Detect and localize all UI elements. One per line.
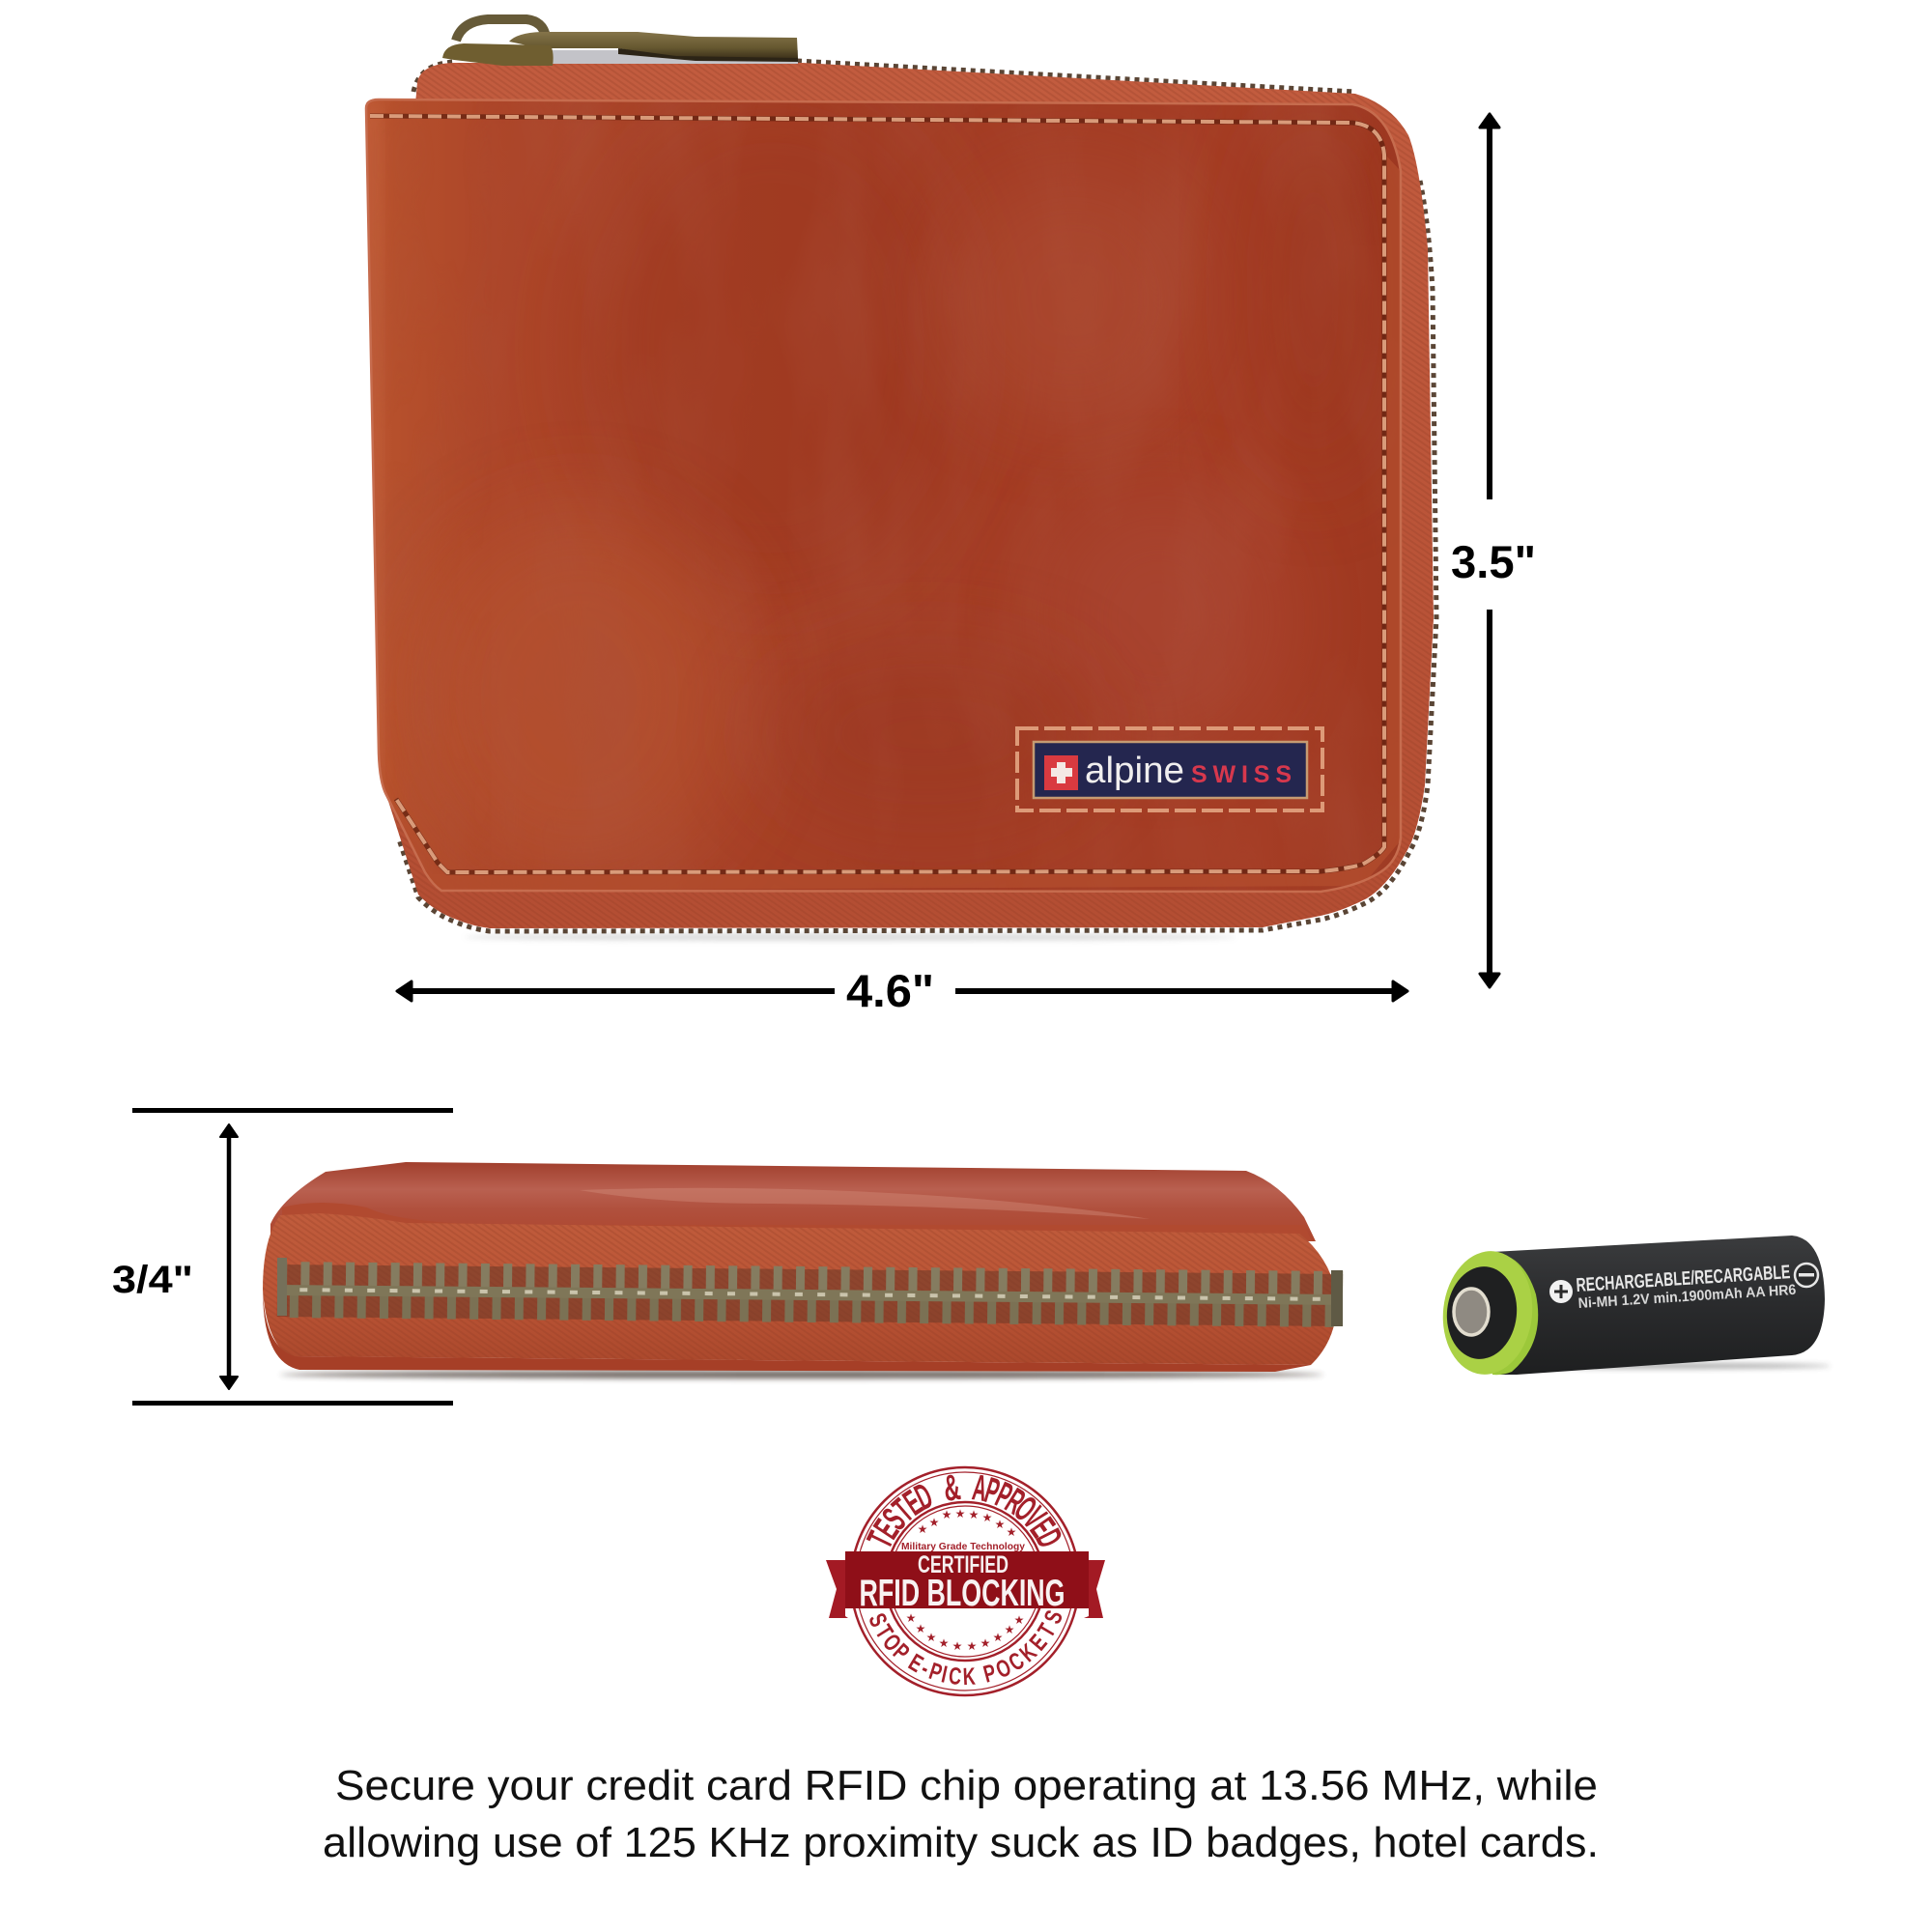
description text [323,1762,1599,1866]
seal top text: O [1007,1490,1043,1529]
seal bottom text: O [992,1653,1015,1684]
RFID blocking text: RFID BLOCKING [860,1573,1065,1614]
seal bottom text: K [1014,1638,1042,1667]
battery text line 1: RECHARGEABLE/RECARGABLE [1576,1262,1791,1296]
seal bottom stars: ★ [1014,1613,1024,1627]
leather tab [509,32,798,58]
width label: 4.6" [846,965,934,1016]
negative symbol [1795,1264,1818,1287]
dark battery end [1442,1263,1521,1363]
zipper end left [277,1258,287,1316]
width dimension arrow [397,965,1407,1016]
label stitching [1017,728,1322,810]
seal bottom stars: ★ [993,1631,1003,1644]
zipper dark tape [277,1264,1343,1326]
seal bottom text: P [888,1637,915,1666]
green ring face [1437,1247,1538,1378]
seal bottom text: S [1038,1606,1068,1628]
seal top text: V [1015,1500,1053,1536]
battery text line 2: Ni-MH 1.2V min.1900mAh AA HR6 [1577,1282,1797,1312]
seal top stars: ★ [969,1508,979,1521]
seal bottom text: C [1004,1646,1029,1676]
zipper fabric tape [386,63,1434,928]
seal bottom stars: ★ [939,1636,949,1650]
seal bottom text: C [948,1662,963,1690]
leather panel edge highlight [366,99,1401,892]
brass slider [442,43,554,66]
leather sheen streak [580,1188,1150,1219]
seal bottom text: O [877,1629,907,1657]
seal bottom stars: ★ [952,1639,962,1653]
description line 1: Secure your credit card RFID chip operating at 13.56 MHz, while [335,1762,1598,1809]
seal rings [851,1467,1079,1695]
swiss cross icon [1044,755,1078,790]
upper teeth [277,1262,1343,1298]
brass ring [456,19,546,41]
seal top text: T [886,1492,922,1530]
seal top stars: ★ [955,1507,965,1520]
military grade text: Military Grade Technology [901,1541,1025,1552]
certified text: CERTIFIED [918,1551,1009,1578]
seal bottom stars: ★ [967,1639,977,1653]
seal top stars: ★ [1007,1525,1016,1539]
seal bottom text: T [1032,1618,1062,1642]
seal top stars: ★ [929,1516,939,1529]
seal top stars: ★ [942,1508,952,1521]
seal bottom text: E [1024,1629,1052,1656]
positive terminal [1454,1289,1489,1335]
leather top [270,1162,1316,1241]
silver teeth below tab [551,50,798,64]
brand name: alpine [1085,751,1184,791]
seal bottom text: - [918,1654,934,1682]
positive symbol [1549,1280,1573,1303]
seal top stars: ★ [995,1518,1005,1531]
bottom leather lip [263,1290,1311,1372]
seal bottom stars: ★ [916,1622,925,1635]
seal top text: S [875,1502,914,1538]
seal top text: E [867,1513,907,1546]
RFID blocking seal [826,1465,1105,1695]
brand name swiss: SWISS [1191,761,1292,788]
ribbon left tail [826,1560,848,1618]
seal top text: E [896,1483,929,1523]
seal top text [861,1465,1069,1554]
seal bottom stars [906,1611,1024,1653]
seal top text: R [998,1482,1032,1522]
height dimension arrow [1451,114,1536,987]
battery shadow [1492,1363,1831,1369]
seal bottom text: S [864,1609,894,1631]
seal bottom text: P [980,1659,999,1688]
seal top text: D [1028,1523,1069,1554]
ribbon band [845,1551,1089,1608]
seal top stars: ★ [918,1522,927,1536]
thickness dimension [112,1108,453,1406]
stitch holes [370,116,1384,872]
seal top text: & [941,1465,963,1509]
fabric body [263,1213,1337,1365]
dark tab underside [618,48,798,62]
seal top text: T [861,1526,901,1554]
green ring side [1483,1253,1538,1375]
height label: 3.5" [1451,536,1536,587]
leather lower band [282,1203,1312,1241]
seal top text: P [980,1470,1004,1513]
zipper end right [1331,1270,1343,1326]
seal top text: E [1022,1511,1062,1545]
battery body [1492,1236,1825,1375]
seal bottom text: K [962,1662,977,1690]
seal bottom text: P [925,1657,946,1687]
seal bottom stars: ★ [926,1631,936,1644]
leather front panel [362,97,1425,908]
seal bottom text [864,1606,1068,1690]
seal bottom text: E [904,1648,928,1678]
thickness label: 3/4" [112,1259,193,1301]
description line 2: allowing use of 125 KHz proximity suck as ID badges, hotel cards. [323,1819,1599,1866]
brand label [1017,728,1322,810]
seal top text: A [970,1468,990,1510]
main wallet front view [362,19,1436,941]
seal top stars: ★ [982,1511,992,1524]
seal bottom text: T [869,1620,899,1644]
seal bottom stars: ★ [980,1636,990,1650]
seal bottom stars: ★ [906,1611,916,1625]
wallet ground shadow [464,933,1236,941]
battery [1437,1236,1831,1378]
side zipper [277,1262,1343,1327]
ribbon right tail [1084,1560,1105,1618]
zipper teeth outer edge [399,61,1436,931]
seal top stars [918,1507,1016,1539]
lower teeth [277,1291,1343,1327]
seal top text: P [989,1475,1018,1517]
zipper chain [277,1285,1343,1305]
wallet side view [263,1162,1343,1378]
zipper pull [442,19,798,66]
seal bottom stars: ★ [1005,1623,1014,1636]
ground shadow [280,1371,1323,1378]
seal bottom text: I [939,1661,950,1689]
leather stitching [370,116,1384,872]
seal top text: D [909,1476,939,1519]
navy woven label [1034,742,1307,798]
